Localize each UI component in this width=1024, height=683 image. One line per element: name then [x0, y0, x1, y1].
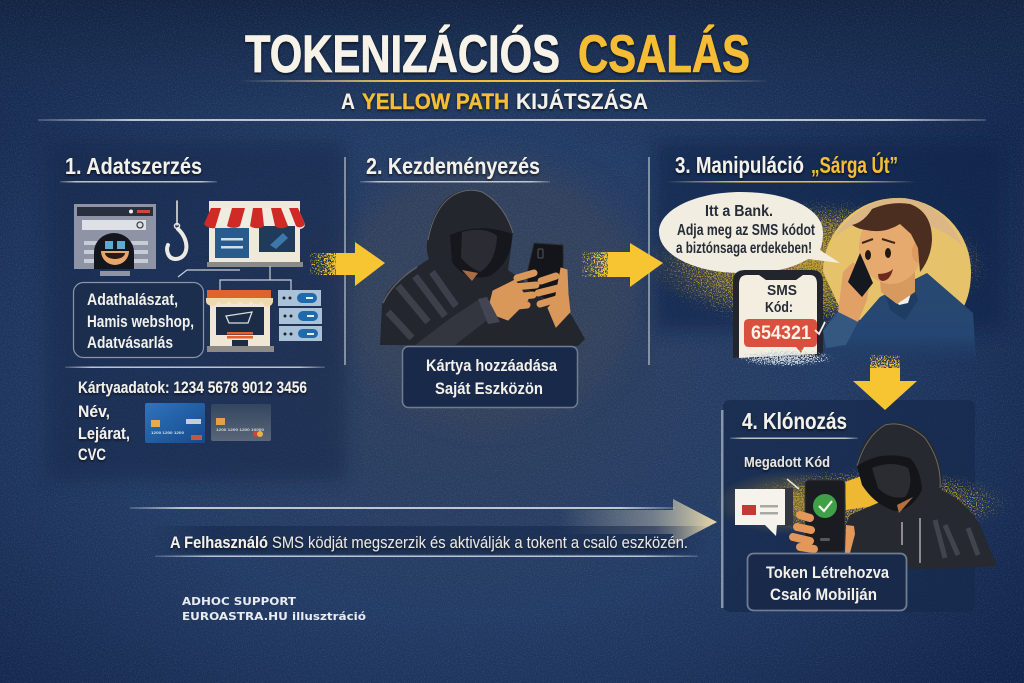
heading: step 3: 3. Manipuláció [675, 152, 804, 178]
panel: step 4 cloning [715, 400, 1015, 612]
speech bubble: a biztónsaga erdekeben! [676, 240, 812, 257]
speech bubble [659, 192, 840, 273]
icon: grey card [211, 404, 271, 441]
phone with SMS code: 654321 [751, 323, 811, 344]
yellow glow: step 4 [715, 467, 1015, 539]
callout: methods: Adatvásarlás [87, 333, 173, 352]
yellow glow: step 3 [645, 197, 995, 333]
connector lines [178, 266, 291, 290]
icon: grey card: 1200 1200 1200 10000 [216, 427, 265, 432]
label box: add card: Saját Eszközön [435, 379, 543, 398]
icon: phone with check [793, 480, 855, 553]
panel backdrop: step 3 [654, 141, 1004, 331]
footer credit: ADHOC SUPPORT [182, 595, 297, 608]
speech bubble: Adja meg az SMS kódot [677, 222, 816, 239]
phone with SMS code: Kód: [765, 299, 793, 316]
heading: step 4: 4. Klónozás [742, 408, 847, 434]
title: TOKENIZÁCIÓS [245, 24, 560, 84]
arrow: step 1 to 2 [310, 242, 385, 286]
label box: add card [402, 346, 578, 408]
icon: servers [278, 290, 322, 341]
icon: fish hook [167, 201, 186, 259]
label box: token created: Csaló Mobilján [770, 585, 877, 604]
heading: step 1: 1. Adatszerzés [65, 153, 202, 179]
panel: step 2 initiation [360, 153, 585, 408]
card data text: Név, [78, 402, 110, 421]
panel backdrop: step 1 [46, 141, 346, 481]
callout: methods: Adathalászat, [87, 290, 178, 309]
icon: fake webshop [204, 201, 305, 267]
arrow: step 2 to 3 [582, 243, 663, 287]
speech bubble: Itt a Bank. [705, 203, 773, 220]
figure: hooded fraudster [847, 423, 997, 569]
label: given code: Megadott Kód [744, 454, 830, 471]
phone with SMS code [733, 270, 835, 367]
title underline [240, 80, 770, 82]
summary text: A Felhasználó [170, 533, 268, 552]
label box: token created: Token Létrehozva [766, 563, 889, 582]
summary band [150, 526, 710, 554]
panel: step 1 data collection [60, 153, 346, 464]
icon: message card [735, 488, 793, 536]
subtitle: A [341, 89, 355, 114]
arrow: step 3 to 4 [853, 355, 917, 410]
icon: blue card: 1200 1200 1200 [151, 430, 185, 435]
footer credit [182, 595, 366, 623]
summary text: SMS ködját megszerzik és aktiválják a tokent a csaló eszközén. [272, 533, 688, 552]
icon: small shop [206, 290, 274, 352]
callout: methods: Hamis webshop, [87, 312, 194, 331]
hands [489, 268, 570, 327]
header rule [38, 119, 986, 121]
icon: phishing browser [74, 204, 156, 276]
subtitle [341, 89, 648, 114]
footer credit: EUROASTRA.HU illusztráció [182, 610, 366, 623]
subtitle: YELLOW PATH [362, 89, 509, 114]
panel: step 3 manipulation [659, 151, 976, 367]
card data text: Kártyaadatok: 1234 5678 9012 3456 [78, 378, 307, 397]
phone with SMS code: SMS [767, 282, 797, 299]
icon: blue card [145, 403, 205, 443]
title: CSALÁS [578, 24, 750, 84]
heading: step 3: „Sárga Út” [811, 151, 898, 178]
card data text: CVC [78, 445, 106, 464]
subtitle: KIJÁTSZÁSA [516, 89, 648, 114]
figure: hooded fraudster with phone [380, 190, 585, 346]
arrow: long summary arrow [130, 499, 717, 545]
label box: token created [748, 554, 906, 610]
card data text: Lejárat, [78, 424, 130, 443]
card data text [78, 378, 307, 464]
heading: step 2: 2. Kezdeményezés [366, 153, 540, 179]
callout: methods [74, 282, 204, 358]
heading: step 3 [675, 151, 898, 178]
label box: add card: Kártya hozzáadása [426, 356, 557, 375]
figure: scared victim on phone [823, 198, 976, 363]
